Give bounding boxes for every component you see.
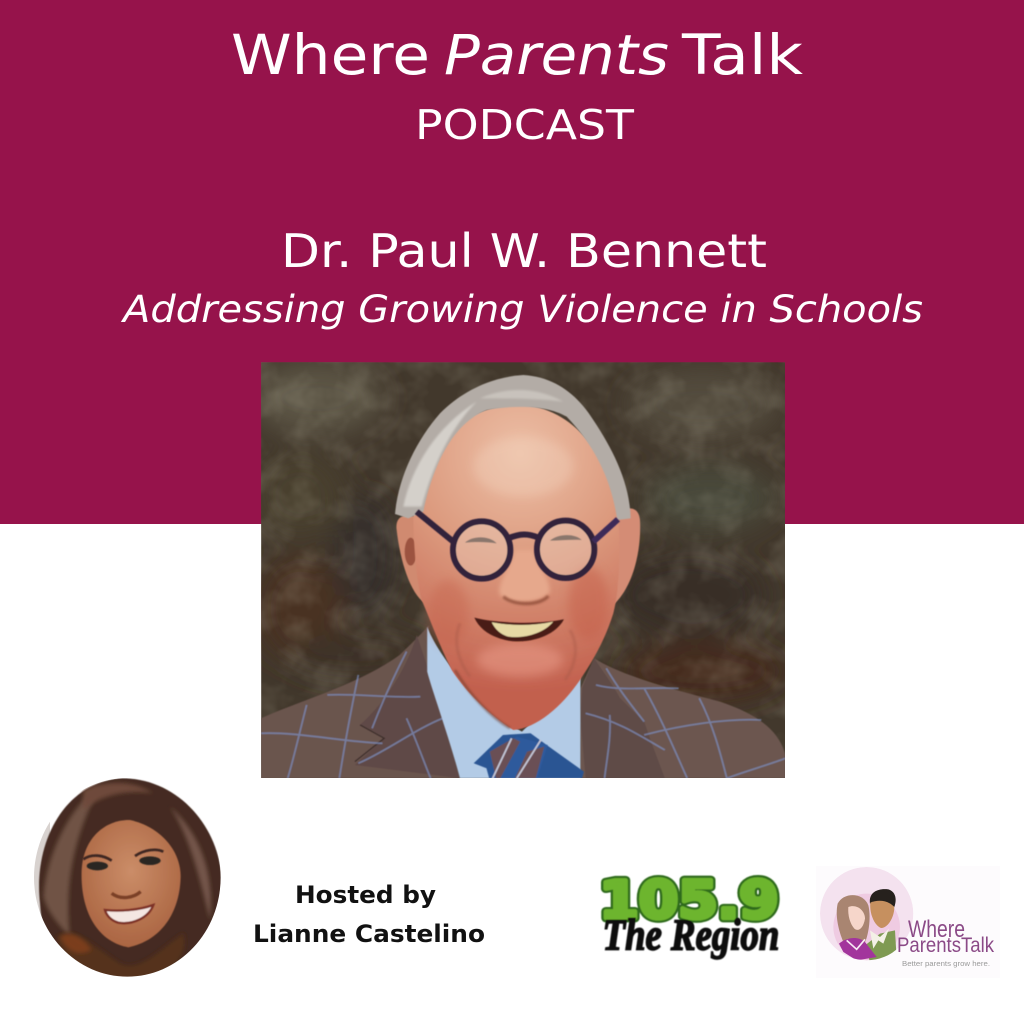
logo illustration: couple	[820, 867, 913, 962]
title: Where Parents Talk: Talk	[681, 23, 803, 87]
guest portrait photo	[252, 362, 785, 778]
logo wordmark: Where	[908, 916, 965, 943]
guest name: Dr. Paul W. Bennett	[281, 224, 767, 278]
host portrait: Lianne Castelino	[33, 777, 223, 983]
logo wordmark	[897, 916, 994, 968]
host hair	[39, 778, 222, 983]
hosted by label: Hosted by	[295, 881, 436, 909]
logo: 105.9 The Region: The Region	[603, 910, 779, 959]
guest head	[395, 375, 640, 730]
title: Where Parents Talk: Where	[231, 23, 430, 87]
title: Where Parents Talk	[231, 23, 803, 87]
logo: Where Parents Talk	[820, 867, 994, 968]
suit jacket	[261, 625, 785, 778]
nose	[499, 550, 550, 604]
logo wordmark: Better parents grow here.	[902, 961, 990, 968]
dress shirt	[427, 627, 580, 778]
facial shading	[428, 437, 608, 728]
smile	[474, 618, 564, 641]
episode topic: Addressing Growing Violence in Schools	[121, 288, 923, 331]
host face	[82, 820, 181, 947]
hair	[395, 375, 631, 520]
ears	[396, 508, 640, 605]
face	[413, 405, 619, 730]
logo wordmark: ParentsTalk	[897, 934, 994, 957]
host features	[83, 850, 163, 923]
hosted by label: Lianne Castelino	[253, 920, 485, 948]
necktie	[474, 733, 584, 778]
hosted by label	[253, 881, 485, 948]
subtitle: podcast: PODCAST	[415, 101, 635, 149]
background band	[0, 0, 1024, 524]
round glasses	[417, 512, 618, 579]
eyes	[465, 535, 582, 543]
logo: 105.9 The Region	[599, 871, 779, 959]
logo: 105.9 The Region: 105.9	[599, 871, 779, 931]
title: Where Parents Talk: Parents	[444, 23, 669, 87]
logo: 105.9 The Region: 105.9	[599, 871, 779, 931]
